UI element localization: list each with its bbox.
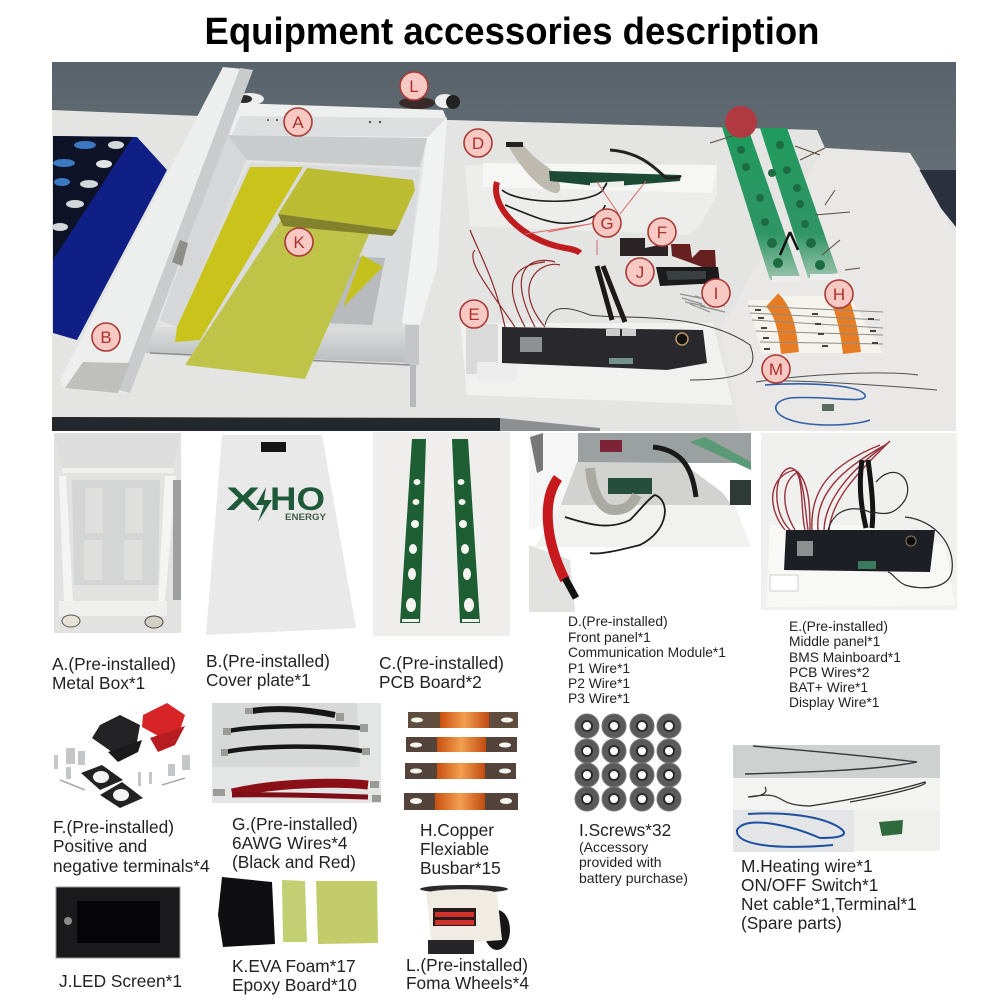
- caption G: G.(Pre-installed): [232, 814, 358, 834]
- photo J: LED screen: [56, 887, 180, 958]
- caption A: A.(Pre-installed): [52, 654, 176, 674]
- callout markers: H: [833, 285, 845, 304]
- caption D: P3 Wire*1: [568, 691, 630, 706]
- photo H: copper busbars: [404, 712, 518, 810]
- caption D: D.(Pre-installed): [568, 614, 668, 629]
- caption D: Communication Module*1: [568, 645, 726, 660]
- caption G: (Black and Red): [232, 852, 356, 872]
- caption F: F.(Pre-installed): [53, 817, 174, 837]
- callout markers: G: [600, 214, 614, 233]
- callout markers: B: [100, 328, 112, 347]
- caption C: C.(Pre-installed): [379, 653, 504, 673]
- photo A: metal box: [54, 433, 181, 633]
- callout markers: J: [636, 263, 644, 282]
- caption I: provided with: [579, 854, 662, 870]
- caption K: K.EVA Foam*17: [232, 956, 356, 976]
- wheels L behind box: [236, 93, 460, 109]
- logo: ENERGY: [285, 512, 326, 522]
- photo G: wires: [212, 703, 381, 803]
- photo C: PCB boards: [373, 432, 510, 636]
- PCB boards C: [710, 127, 860, 282]
- sheet and BMS board E: [460, 230, 753, 405]
- callout markers: A: [292, 113, 304, 132]
- photo K: foam and epoxy: [218, 877, 378, 947]
- blue battery case: [52, 136, 167, 340]
- caption M: ON/OFF Switch*1: [741, 875, 878, 895]
- photo I: screws: [575, 714, 681, 811]
- caption G: 6AWG Wires*4: [232, 833, 348, 853]
- panel: main overview photo: [52, 62, 956, 431]
- caption M: (Spare parts): [741, 913, 842, 933]
- screws I: [680, 294, 725, 312]
- pointers to G: [525, 181, 646, 255]
- logo: HO: [270, 481, 325, 517]
- photo L: wheel: [420, 885, 510, 954]
- callout markers: K: [293, 233, 305, 252]
- caption D: P2 Wire*1: [568, 676, 630, 691]
- caption C: PCB Board*2: [379, 672, 482, 692]
- yellow foam and epoxy K: [175, 167, 415, 379]
- caption D: Front panel*1: [568, 630, 651, 645]
- caption L: Foma Wheels*4: [406, 973, 529, 993]
- cover plate B: [60, 67, 253, 393]
- caption E: BAT+ Wire*1: [789, 680, 868, 695]
- caption E: PCB Wires*2: [789, 665, 870, 680]
- caption M: M.Heating wire*1: [741, 856, 873, 876]
- caption M: Net cable*1,Terminal*1: [741, 894, 917, 914]
- caption L: L.(Pre-installed): [406, 955, 528, 975]
- caption F: negative terminals*4: [53, 856, 210, 876]
- logo: [226, 481, 326, 522]
- caption E: Middle panel*1: [789, 634, 880, 649]
- photo F: terminals: [54, 703, 190, 808]
- logo: X: [226, 481, 261, 517]
- front panel D: [465, 142, 717, 253]
- title: Equipment accessories description: [204, 11, 820, 53]
- callout markers: M: [769, 360, 783, 379]
- caption I: battery purchase): [579, 870, 688, 886]
- caption E: BMS Mainboard*1: [789, 650, 901, 665]
- caption H: Flexiable: [420, 839, 489, 859]
- caption B: Cover plate*1: [206, 670, 311, 690]
- callout markers: E: [468, 305, 480, 324]
- caption E: E.(Pre-installed): [789, 619, 888, 634]
- caption H: H.Copper: [420, 820, 494, 840]
- caption I: (Accessory: [579, 839, 648, 855]
- spare cables M: [756, 373, 937, 425]
- caption F: Positive and: [53, 836, 147, 856]
- photo D: front panel with wires: [529, 433, 751, 612]
- callout markers: D: [472, 134, 484, 153]
- caption D: P1 Wire*1: [568, 661, 630, 676]
- terminals F: [620, 238, 716, 268]
- callout markers: [92, 72, 853, 383]
- callout markers: L: [409, 77, 419, 96]
- copper busbars H: [748, 296, 883, 353]
- photo B: cover plate: [206, 435, 356, 635]
- metal box A: [143, 103, 447, 407]
- callout markers: I: [714, 284, 718, 303]
- caption I: I.Screws*32: [579, 820, 671, 840]
- caption A: Metal Box*1: [52, 673, 145, 693]
- caption H: Busbar*15: [420, 858, 501, 878]
- LED screen J: [656, 267, 720, 286]
- photo E: BMS mainboard with wires: [761, 433, 957, 610]
- photo M: spare parts: [733, 745, 940, 852]
- caption E: Display Wire*1: [789, 695, 879, 710]
- caption B: B.(Pre-installed): [206, 651, 330, 671]
- caption J: J.LED Screen*1: [59, 971, 182, 991]
- callout markers: F: [657, 223, 667, 242]
- caption K: Epoxy Board*10: [232, 975, 357, 995]
